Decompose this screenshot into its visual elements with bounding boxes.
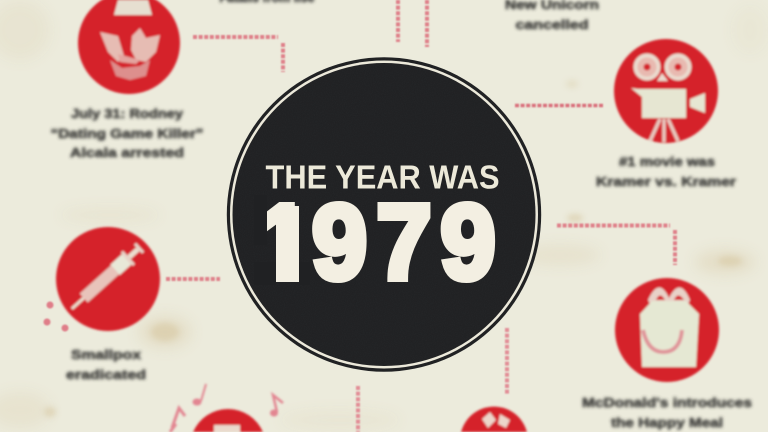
text: Rodney caption: July 31: Rodney (71, 107, 183, 121)
text: smallpox caption: Smallpox (71, 348, 141, 362)
icon: face in red circle (78, 0, 180, 94)
text: movie caption: #1 movie was (619, 155, 715, 169)
icon: droplets (44, 302, 68, 332)
heading: 1979: 9 (312, 184, 367, 302)
heading: 1979 (254, 184, 496, 302)
badge disc with ring (227, 57, 541, 372)
connector: bottom right dashed line (505, 328, 509, 395)
text: happy meal caption: the Happy Meal (611, 416, 723, 430)
panel: happy meal (582, 278, 752, 430)
icon: syringe in red circle (56, 227, 160, 331)
text: Rodney caption: “Dating Game Killer” (50, 127, 204, 141)
connector: smallpox dashed line (166, 277, 220, 281)
connector: top centre right dashed line (425, 0, 429, 47)
icon: film camera in red circle (614, 39, 718, 143)
icon: happy meal box in red circle (615, 278, 719, 382)
panel: smallpox (44, 227, 160, 382)
connector: bottom left dashed line (356, 386, 360, 432)
panel: bottom centre event (461, 407, 527, 432)
heading: 1979: 1 (258, 184, 308, 302)
text: happy meal caption: McDonald's introduces (582, 396, 752, 410)
connector: movie dashed line (515, 104, 604, 107)
connector: top centre left dashed line (396, 0, 400, 42)
icon: red circle with music notes (170, 384, 283, 432)
text: Rodney caption: Alcala arrested (70, 146, 184, 160)
text: movie caption: Kramer vs. Kramer (596, 175, 736, 189)
text: top fragment right: cancelled (516, 18, 588, 32)
connector: happy meal dashed line (557, 226, 675, 265)
heading: 1979: 7 (376, 184, 432, 302)
panel: music (bottom left) (170, 384, 283, 432)
central badge (227, 57, 541, 372)
icon: red circle (461, 407, 527, 432)
connector: top-left dashed line (193, 37, 283, 72)
heading: the year was: THE YEAR WAS (266, 160, 500, 196)
heading: 1979: 9 (440, 184, 496, 302)
text: smallpox caption: eradicated (66, 368, 146, 382)
panel: Rodney Alcala arrest (50, 0, 204, 160)
panel: movie (596, 39, 736, 189)
